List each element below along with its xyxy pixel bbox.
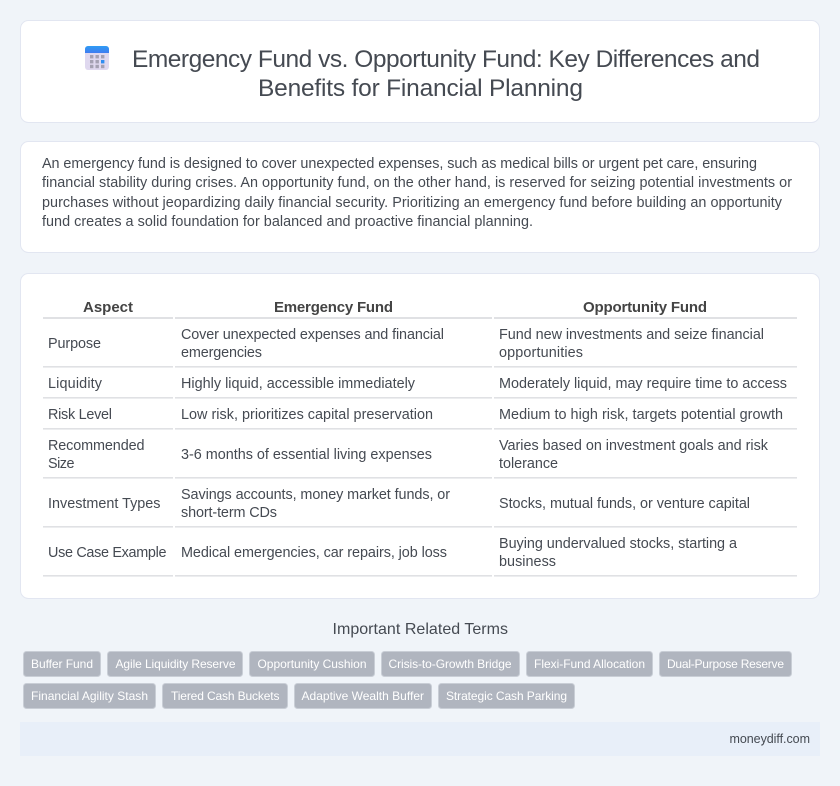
text block: introduction: financial stability during crises. An opportunity fund, on the other hand, is reserved for seizing potential investments or <box>42 175 792 191</box>
row: recommended size: Recommended <box>48 438 144 454</box>
row: purpose: Fund new investments and seize financial <box>499 327 764 343</box>
tag: Opportunity Cushion <box>258 657 366 671</box>
row: investment types: Savings accounts, money market funds, or <box>181 487 450 503</box>
tag: Adaptive Wealth Buffer <box>302 689 424 703</box>
table header: Aspect <box>83 299 133 316</box>
row: liquidity: Moderately liquid, may require time to access <box>499 376 787 392</box>
text block: introduction: purchases without jeopardizing daily financial security. Prioritizing an emergency fund before building an opportunity <box>42 195 783 211</box>
title <box>132 46 760 102</box>
row: investment types <box>48 487 750 521</box>
row: recommended size: tolerance <box>499 456 558 472</box>
panel: introduction <box>20 142 820 252</box>
row: risk level <box>48 407 783 423</box>
tag <box>382 652 520 676</box>
panel: header <box>20 20 820 122</box>
tag <box>250 652 374 676</box>
tag list: related terms <box>24 652 792 708</box>
row: purpose: Purpose <box>48 336 101 352</box>
table header: Emergency Fund <box>274 299 393 316</box>
row: purpose: emergencies <box>181 345 262 361</box>
tag <box>294 684 432 708</box>
tag <box>24 652 100 676</box>
tag <box>438 684 574 708</box>
row: purpose: opportunities <box>499 345 583 361</box>
panel: comparison table <box>20 274 820 598</box>
tag: Agile Liquidity Reserve <box>116 657 236 671</box>
table header: Opportunity Fund <box>583 299 707 316</box>
row: recommended size: 3-6 months of essential living expenses <box>181 447 432 463</box>
row: investment types: Stocks, mutual funds, or venture capital <box>499 496 750 512</box>
row: use case example: Buying undervalued stocks, starting a <box>499 536 737 552</box>
heading: related terms: Important Related Terms <box>332 621 508 638</box>
title: Emergency Fund vs. Opportunity Fund: Key Differences and <box>132 46 760 73</box>
row: risk level: Low risk, prioritizes capital preservation <box>181 407 433 423</box>
row: recommended size: Varies based on investment goals and risk <box>499 438 769 454</box>
icon: calendar <box>85 46 109 70</box>
tag <box>108 652 242 676</box>
table header <box>83 299 707 316</box>
tag: Tiered Cash Buckets <box>171 689 280 703</box>
row: liquidity: Highly liquid, accessible immediately <box>181 376 416 392</box>
tag <box>660 652 792 676</box>
row: purpose <box>48 327 764 361</box>
row: use case example: Use Case Example <box>48 545 166 561</box>
row: recommended size <box>48 438 769 472</box>
tag: Strategic Cash Parking <box>446 689 567 703</box>
row: liquidity <box>48 376 787 392</box>
tag <box>162 684 288 708</box>
row: purpose: Cover unexpected expenses and financial <box>181 327 444 343</box>
tag: Crisis-to-Growth Bridge <box>388 657 512 671</box>
footer <box>20 722 820 756</box>
row: use case example: business <box>499 554 556 570</box>
row: risk level: Risk Level <box>48 407 112 423</box>
footer: moneydiff.com <box>730 732 810 746</box>
text block: introduction: fund creates a solid foundation for balanced and proactive financial planning. <box>42 214 533 230</box>
tag: Flexi-Fund Allocation <box>534 657 645 671</box>
title: Benefits for Financial Planning <box>258 75 583 102</box>
row: investment types: short-term CDs <box>181 505 277 521</box>
row: use case example <box>48 536 737 570</box>
tag <box>526 652 652 676</box>
row: risk level: Medium to high risk, targets potential growth <box>499 407 783 423</box>
tag <box>24 684 156 708</box>
tag: Dual-Purpose Reserve <box>667 657 784 671</box>
text block: introduction <box>42 156 792 230</box>
tag: Financial Agility Stash <box>31 689 148 703</box>
tag: Buffer Fund <box>31 657 93 671</box>
row: investment types: Investment Types <box>48 496 160 512</box>
row: use case example: Medical emergencies, car repairs, job loss <box>181 545 447 561</box>
row: liquidity: Liquidity <box>48 376 103 392</box>
text block: introduction: An emergency fund is designed to cover unexpected expenses, such as medical bills or urgent pet care, ensuring <box>42 156 757 172</box>
row: recommended size: Size <box>48 456 74 472</box>
